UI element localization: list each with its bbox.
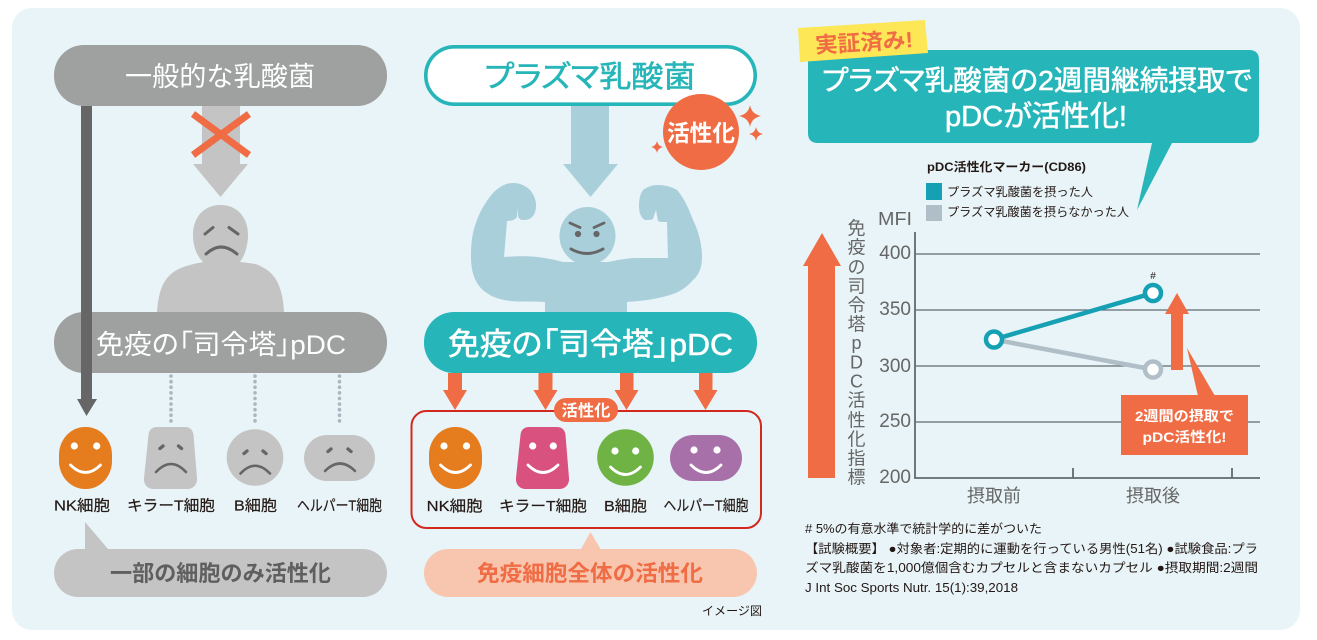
label: cell names colored group: ヘルパーT細胞	[664, 498, 748, 514]
icon: NK cell happy colored	[429, 427, 482, 489]
callout: two weeks intake activates pDC: pDC活性化!	[1142, 429, 1226, 445]
panel: plasma lactic acid bacteria	[412, 47, 763, 618]
icon: B cell sad	[227, 429, 283, 486]
badge: activation circle with sparkles: 活性化	[667, 120, 735, 146]
tag: proven	[798, 20, 928, 62]
arrow: direct dark arrow to NK cell	[77, 106, 97, 416]
label: cell names colored group: キラーT細胞	[499, 498, 587, 515]
label: cell names grey group: ヘルパーT細胞	[297, 498, 382, 514]
icon: NK cell happy	[59, 427, 112, 489]
legend: プラズマ乳酸菌を摂らなかった人	[947, 204, 1129, 219]
footnotes: # 5%の有意水準で統計学的に差がついた	[805, 521, 1042, 536]
line chart: #	[1150, 271, 1156, 282]
arrow: blue arrow	[563, 106, 618, 197]
badge: activation circle with sparkles	[651, 94, 763, 170]
footnotes	[805, 521, 1258, 595]
pill: pDC commander grey	[54, 312, 387, 373]
line chart: 摂取後	[1126, 486, 1180, 506]
label: cell names colored group: NK細胞	[427, 498, 483, 515]
callout: two weeks intake activates pDC	[1121, 348, 1248, 455]
callout: whole immune system activated	[424, 532, 757, 597]
heading: plasma lactic acid bacteria: プラズマ乳酸菌	[484, 61, 696, 94]
axis title vertical: 免疫の司令塔pDC活性化指標	[848, 218, 866, 488]
pill: pDC commander teal	[424, 312, 757, 373]
panel: clinical result chart	[798, 20, 1260, 595]
label: cell names grey group: B細胞	[234, 498, 277, 514]
pill: pDC commander grey: 免疫の「司令塔」pDC	[96, 330, 346, 360]
speech bubble: headline: pDCが活性化!	[945, 100, 1127, 133]
footnotes: J Int Soc Sports Nutr. 15(1):39,2018	[805, 581, 1018, 595]
arrow: blocked grey arrow	[193, 106, 248, 197]
footnotes: ズマ乳酸菌を1,000億個含むカプセルと含まないカプセル ●摂取期間:2週間	[805, 560, 1258, 575]
speech bubble: headline	[808, 50, 1259, 210]
arrows: four orange arrows	[443, 373, 718, 410]
line chart	[878, 209, 1260, 506]
line chart: 摂取前	[967, 486, 1021, 506]
pill: pDC commander teal: 免疫の「司令塔」pDC	[448, 327, 733, 362]
callout: whole immune system activated: 免疫細胞全体の活性化	[477, 561, 703, 586]
callout: only some cells activated	[54, 522, 387, 597]
arrow: activation gain	[1165, 293, 1189, 370]
line chart: MFI	[878, 209, 912, 229]
heading: plasma lactic acid bacteria	[426, 47, 755, 104]
callout: only some cells activated: 一部の細胞のみ活性化	[110, 561, 331, 586]
label: cell names grey group: キラーT細胞	[127, 498, 215, 514]
legend: pDC活性化マーカー(CD86)	[927, 159, 1086, 174]
icon: red cross	[193, 114, 249, 155]
icon: muscular happy person	[471, 183, 702, 312]
icon: helper T cell happy	[670, 435, 742, 481]
panel: general lactic acid bacteria	[54, 45, 387, 597]
dotted connectors	[171, 376, 340, 421]
label: cell names grey group: NK細胞	[54, 498, 110, 514]
icon: killer T cell happy	[516, 427, 569, 489]
icon: killer T cell sad	[144, 427, 197, 489]
label: cell names colored group	[427, 498, 748, 515]
line chart: 350	[879, 299, 911, 320]
heading: general lactic acid bacteria: 一般的な乳酸菌	[125, 62, 315, 92]
icon: sad person	[157, 205, 284, 312]
icon: helper T cell sad	[304, 435, 375, 481]
label: cell names colored group: B細胞	[604, 498, 647, 515]
badge: activation pill: 活性化	[562, 401, 610, 420]
line chart: 250	[879, 411, 911, 432]
legend	[926, 159, 1129, 221]
caption: image diagram note: イメージ図	[702, 604, 762, 618]
icon: B cell happy	[597, 429, 654, 486]
line chart: 300	[879, 356, 911, 377]
speech bubble: headline: プラズマ乳酸菌の2週間継続摂取で	[822, 65, 1252, 96]
footnotes: 【試験概要】 ●対象者:定期的に運動を行っている男性(51名) ●試験食品:プラ	[805, 541, 1258, 556]
red outline group box	[412, 411, 761, 528]
callout: two weeks intake activates pDC: 2週間の摂取で	[1135, 408, 1234, 424]
label: cell names grey group	[54, 498, 382, 514]
tag: proven: 実証済み!	[814, 27, 914, 58]
arrow: big up arrow	[803, 233, 841, 478]
line chart: 200	[879, 467, 911, 488]
badge: activation pill	[554, 398, 618, 422]
legend: プラズマ乳酸菌を摂った人	[947, 184, 1093, 199]
line chart: 400	[879, 243, 911, 264]
heading: general lactic acid bacteria	[54, 45, 387, 106]
